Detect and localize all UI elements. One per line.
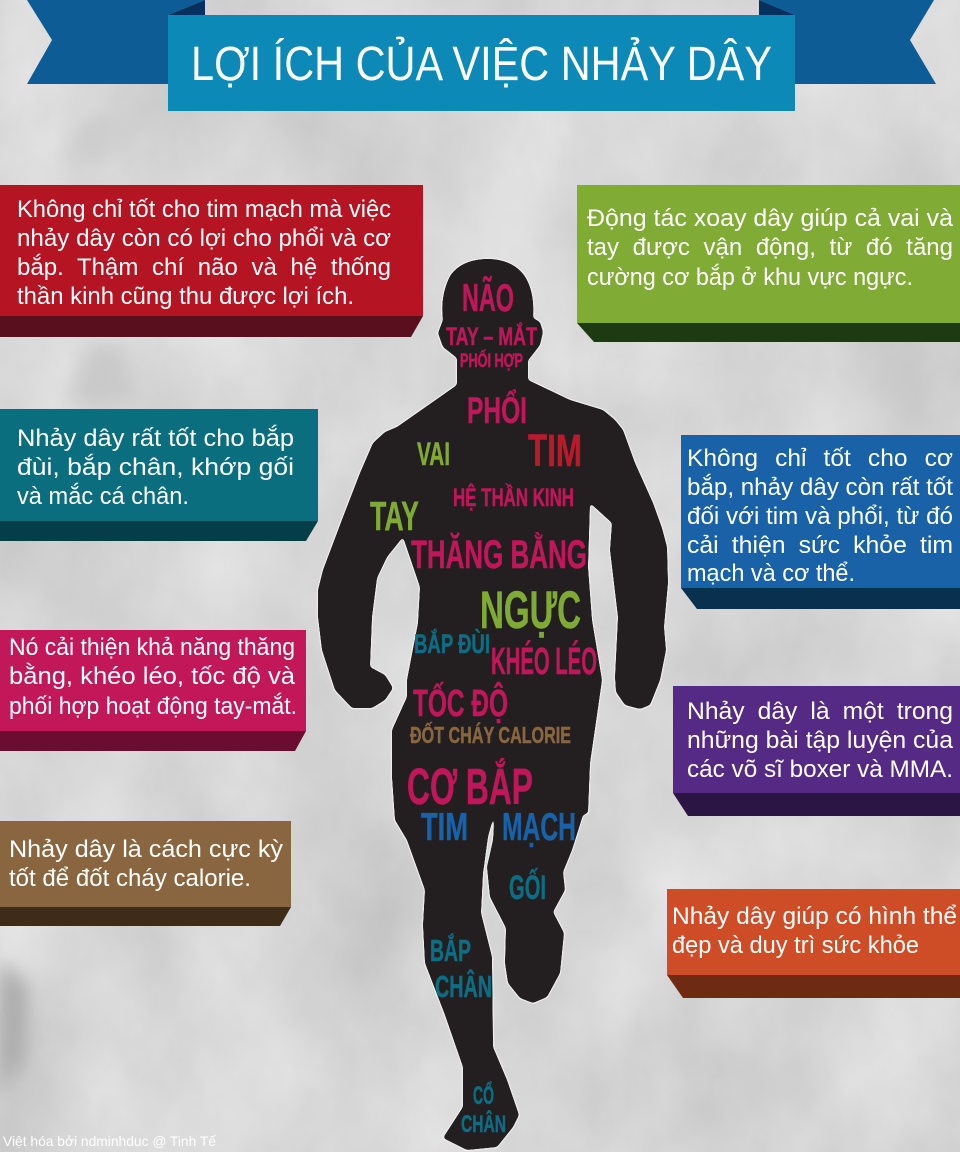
text block: phối hợp hoạt động tay-mắt. (9, 693, 297, 720)
panel depth (0, 521, 318, 541)
body word labels: HỆ THẦN KINH (453, 482, 574, 512)
text block: bắp, nhảy dây còn rất tốt (687, 474, 953, 501)
panel: pink, balance and coordination (0, 630, 306, 751)
body word labels: ĐỐT CHÁY CALORIE (410, 721, 571, 748)
body word labels: VAI (417, 436, 450, 472)
panel depth (0, 316, 423, 337)
text block: và mắc cá chân. (17, 483, 189, 510)
text block (9, 836, 283, 892)
body word labels: NÃO (462, 276, 514, 320)
panel depth (0, 907, 291, 926)
body word labels (370, 276, 597, 1138)
text block: cải thiện sức khỏe tim (687, 532, 953, 559)
panel depth (667, 975, 960, 998)
body word labels: CHÂN (461, 1110, 506, 1138)
text block: Nhảy dây rất tốt cho bắp (17, 425, 294, 452)
body word labels: CƠ BẮP (407, 757, 533, 815)
panel: green, shoulders and arms (577, 185, 960, 342)
text block: Nhảy dây là cách cực kỳ (9, 836, 283, 863)
body word labels: CỔ (473, 1080, 494, 1110)
body word labels: PHỐI HỢP (460, 350, 523, 372)
ribbon fold left (168, 0, 205, 15)
credit line: Việt hóa bởi ndminhduc @ Tinh Tế (3, 1133, 216, 1149)
text block (672, 903, 957, 959)
body word labels: TIM (528, 425, 582, 476)
body word labels: TAY (370, 493, 419, 539)
text block (17, 425, 294, 510)
body word labels: NGỰC (480, 581, 581, 640)
title ribbon (27, 0, 936, 111)
text block (17, 196, 391, 310)
body word labels: BẮP (430, 932, 471, 968)
banner (168, 15, 795, 111)
body word labels: TAY – MẮT (446, 321, 537, 351)
text block: Không chỉ tốt cho tim mạch mà việc (17, 196, 391, 223)
text block: nhảy dây còn có lợi cho phổi và cơ (17, 225, 391, 252)
text block: bằng, khéo léo, tốc độ và (9, 663, 296, 690)
text block: tay được vận động, từ đó tăng (587, 234, 953, 261)
panel depth (673, 793, 960, 816)
body word labels: KHÉO LÉO (491, 639, 597, 683)
text block: tốt để đốt cháy calorie. (9, 865, 251, 892)
text block: đùi, bắp chân, khớp gối (17, 454, 294, 481)
body word labels: TỐC ĐỘ (413, 680, 508, 725)
text block (687, 698, 954, 783)
body word labels: BẮP ĐÙI (414, 628, 490, 659)
text block: Nó cải thiện khả năng thăng (9, 634, 295, 661)
text block: cường cơ bắp ở khu vực ngực. (587, 264, 913, 291)
text block: Nhảy dây là một trong (687, 698, 953, 725)
text block: đẹp và duy trì sức khỏe (672, 932, 919, 959)
panel: brown, burning calories (0, 821, 291, 926)
body word labels: THĂNG BẰNG (411, 531, 587, 577)
body silhouette (318, 259, 668, 1150)
text block: các võ sĩ boxer và MMA. (687, 756, 953, 783)
body word labels: TIM (421, 806, 468, 849)
body word labels: CHÂN (435, 968, 492, 1004)
title: LỢI ÍCH CỦA VIỆC NHẢY DÂY (191, 36, 772, 91)
text block (9, 634, 297, 720)
text block: Động tác xoay dây giúp cả vai và (587, 205, 954, 232)
text block: đối với tim và phổi, từ đó (687, 503, 953, 530)
panel depth (577, 323, 960, 342)
text block: mạch và cơ thể. (687, 560, 855, 587)
ribbon tail right (759, 0, 936, 84)
panel: teal, legs and joints (0, 409, 318, 541)
body word labels: MẠCH (502, 806, 576, 849)
panel depth (681, 588, 960, 609)
ribbon fold right (759, 0, 795, 15)
ribbon tail left (27, 0, 205, 84)
text block (687, 445, 953, 587)
text block (587, 205, 954, 291)
panel: orange, body shape and health (667, 889, 960, 998)
text block: thần kinh cũng thu được lợi ích. (17, 283, 354, 310)
text block: Không chỉ tốt cho cơ (687, 445, 953, 472)
body word labels: GỐI (509, 868, 546, 907)
text block: những bài tập luyện của (687, 727, 954, 754)
text block: Nhảy dây giúp có hình thể (672, 903, 957, 930)
text block: bắp. Thậm chí não và hệ thống (17, 254, 391, 281)
panel: purple, boxers and MMA (673, 686, 960, 816)
body word labels: PHỔI (467, 388, 527, 431)
panel: blue, cardiovascular (681, 435, 960, 609)
panel depth (0, 731, 306, 751)
panel: red, heart lungs muscles brain (0, 185, 423, 337)
